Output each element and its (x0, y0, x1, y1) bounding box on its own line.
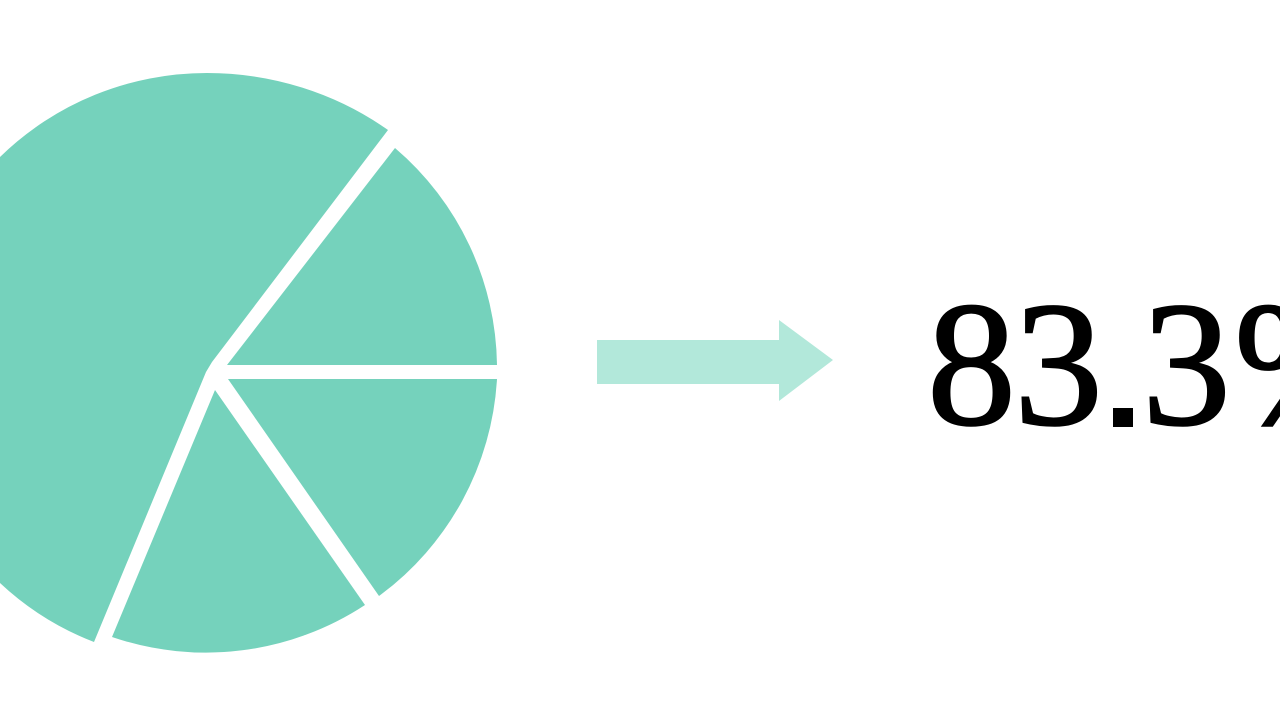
slice: large (0, 73, 388, 642)
percentage value: . (1107, 309, 1140, 453)
arrow (597, 320, 833, 401)
pie chart (0, 73, 497, 653)
slice: upper right (227, 148, 497, 365)
slice: bottom (112, 390, 365, 653)
slice: lower right (228, 379, 497, 596)
